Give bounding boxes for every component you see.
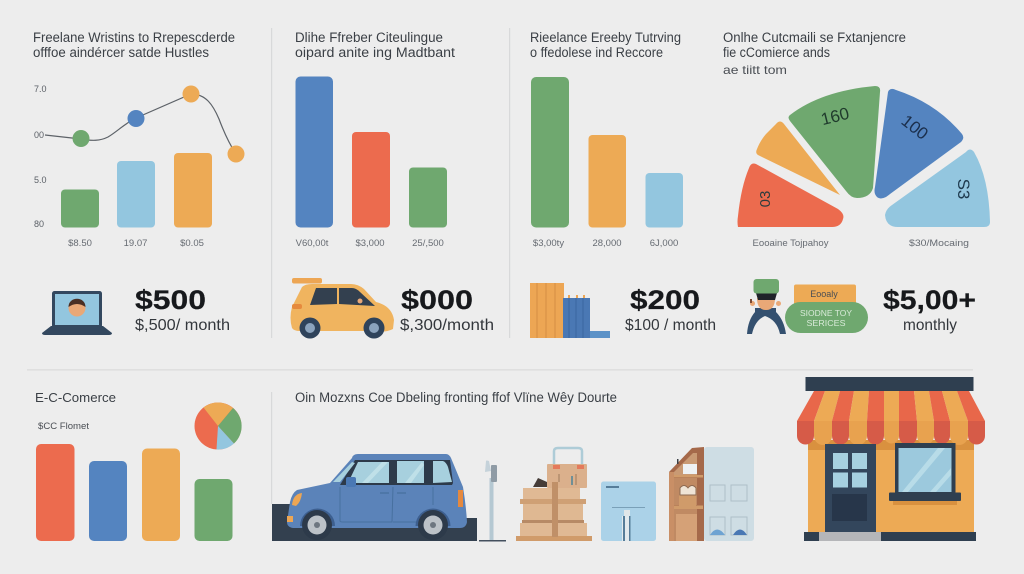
bar value labels: 19.07 — [124, 238, 147, 249]
panel: e-commerce — [35, 390, 242, 541]
stat: $200 — [625, 285, 716, 334]
badge: services: SERICES — [806, 318, 846, 328]
stat: $000 — [400, 285, 494, 334]
heading: e-commerce — [35, 390, 116, 431]
stat: $200: $100 / month — [625, 317, 716, 334]
axis labels: 5.0 — [34, 175, 47, 185]
stat: $000: $000 — [401, 285, 473, 315]
segment: blue — [874, 89, 963, 198]
icon: lamp post — [479, 460, 506, 542]
axis labels — [34, 84, 47, 229]
bar value labels: 6J,000 — [650, 238, 678, 249]
panel: delivery — [272, 390, 754, 542]
panel: tutoring — [530, 30, 716, 338]
illustration: storefront — [797, 377, 985, 541]
axis labels: 80 — [34, 219, 44, 229]
stat: $500 — [135, 285, 230, 334]
axis labels: 7.0 — [34, 84, 47, 94]
icon: shelf and wall panel — [669, 447, 754, 541]
heading: tutoring: Rieelance Ereeby Tutrving — [530, 30, 681, 45]
heading: online customer — [723, 30, 906, 77]
heading: online driving: oipard anite ing Madtbant — [295, 45, 455, 60]
striped awning — [797, 391, 985, 445]
bar value labels — [68, 238, 204, 249]
stat: $500: $,500/ month — [135, 317, 230, 334]
bar value labels: V60,00t — [296, 238, 329, 249]
heading: tutoring: o ffedolese ind Reccore — [530, 45, 663, 60]
panel: online driving — [290, 30, 494, 338]
heading: delivery: Oin Mozxns Coe Dbeling fronting ffof Vlïne Wêy Dourte — [295, 390, 617, 405]
icon: parcel stack — [516, 448, 592, 541]
icon: blue van — [287, 454, 467, 540]
bar chart: driving income — [296, 76, 447, 228]
fan chart — [738, 86, 990, 227]
badge: services: Eooaly — [810, 289, 838, 299]
stat: $500: $500 — [135, 285, 206, 315]
icon: yellow car — [290, 278, 394, 338]
door — [825, 444, 876, 533]
bar chart: e-commerce — [36, 444, 232, 541]
fan labels: Eooaine Tojpahoy — [752, 238, 829, 249]
bar value labels: 28,000 — [592, 238, 622, 249]
panel: freelance writing — [33, 30, 244, 335]
heading: e-commerce: $CC Flomet — [38, 421, 90, 431]
bar value labels: $3,00ty — [533, 238, 564, 249]
segment: red: 03 — [757, 191, 774, 207]
illustration: dark road — [272, 504, 477, 541]
segment: orange — [756, 122, 840, 195]
icon: laptop with person — [42, 291, 112, 335]
badge: services: SIODNE TOY — [800, 308, 852, 318]
panel: online customer services — [723, 30, 990, 334]
heading: online customer: fie cComierce ands — [723, 45, 830, 60]
segment: red — [738, 164, 843, 227]
stat: $5,00+: monthly — [903, 317, 957, 334]
heading: freelance writing — [33, 30, 235, 60]
heading: online driving — [295, 30, 455, 60]
segment: green — [788, 86, 880, 198]
segment: light blue — [885, 150, 990, 227]
segment: green: 160 — [819, 104, 851, 129]
heading: freelance writing: offfoe aindércer satde Hustles — [33, 45, 209, 60]
bar value labels: 25/,500 — [412, 238, 444, 249]
stat: $5,00+: $5,00+ — [883, 285, 976, 315]
bar value labels — [533, 238, 678, 249]
fan labels: $30/Mocaing — [909, 238, 969, 249]
bar value labels: $8.50 — [68, 238, 92, 249]
window — [889, 443, 961, 505]
bar value labels: $3,000 — [355, 238, 385, 249]
segment: blue: 100 — [898, 111, 932, 144]
base and step — [804, 532, 976, 541]
bar chart: writing income — [61, 153, 212, 228]
heading: e-commerce: E-C-Comerce — [35, 390, 116, 405]
badge: services — [785, 284, 868, 333]
heading: freelance writing: Freelane Wristins to Rrepescderde — [33, 30, 235, 45]
icon: blue box — [601, 482, 656, 541]
stat: $000: $,300/month — [400, 317, 494, 334]
heading: online customer: ae tiitt tom — [723, 63, 787, 77]
bar value labels — [296, 238, 444, 249]
stat: $5,00+ — [883, 285, 976, 334]
fan labels — [752, 238, 969, 249]
roof bar — [806, 377, 974, 391]
heading: online customer: Onlhe Cutcmaili se Fxtanjencre — [723, 30, 906, 45]
heading: tutoring — [530, 30, 681, 60]
icon: person with green cap — [747, 279, 786, 334]
axis labels: 00 — [34, 130, 44, 140]
heading: online driving: Dlihe Ffreber Citeulingue — [295, 30, 443, 45]
bar chart: tutoring income — [531, 77, 683, 228]
line chart with markers — [45, 86, 244, 162]
pie chart — [194, 402, 242, 450]
segment: light blue: S3 — [954, 179, 973, 199]
bar value labels: $0.05 — [180, 238, 204, 249]
shop wall — [808, 440, 974, 533]
stat: $200: $200 — [630, 285, 700, 315]
icon: books — [530, 283, 610, 338]
